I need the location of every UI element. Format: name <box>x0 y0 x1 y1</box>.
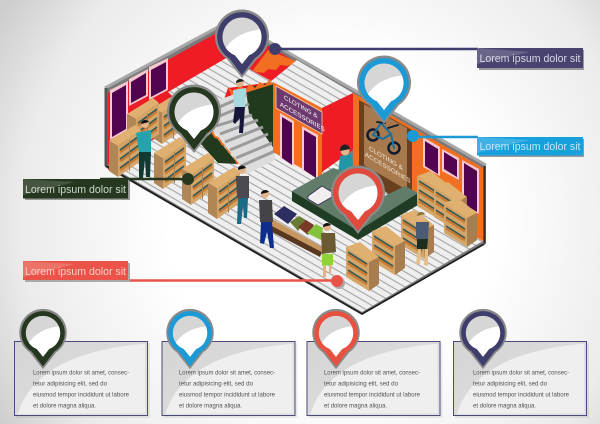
brown sign panel: CLOTING & <box>369 145 403 172</box>
connector: green <box>100 173 194 185</box>
person striped shirt <box>236 166 249 224</box>
label: red <box>23 261 130 282</box>
floor <box>108 96 483 312</box>
pin: card 4 <box>459 309 507 369</box>
text: card 1: Lorem ipsum dolor sit amet, consec- <box>33 370 129 376</box>
cash register <box>308 186 332 205</box>
person at left shelf <box>136 120 151 178</box>
text: card 4 <box>473 370 569 410</box>
brown sign panel: ACCESSORIES <box>365 151 411 185</box>
person navy jeans <box>259 190 274 248</box>
text: card 2: eiusmod tempor incididunt ut labore <box>179 392 275 398</box>
card 3 <box>307 309 442 418</box>
checkout counter <box>292 168 418 240</box>
shop roof <box>270 60 353 108</box>
text: card 2 <box>179 370 275 410</box>
pin: dark green <box>167 85 221 153</box>
text: card 2: tetur adipisicing elit, sed do <box>179 380 253 388</box>
pin: purple <box>215 10 269 78</box>
person on stairs <box>233 79 246 133</box>
text: card 3: eiusmod tempor incididunt ut labore <box>324 392 420 398</box>
text: card 3 <box>324 370 420 410</box>
card 4 <box>454 309 589 418</box>
connector: purple <box>269 43 478 55</box>
text: card 3: tetur adipisicing elit, sed do <box>324 380 398 388</box>
shelves back left <box>109 92 240 219</box>
connector: blue <box>407 130 478 142</box>
label: purple: Lorem ipsum dolor sit <box>480 53 580 65</box>
lower green void <box>200 132 238 164</box>
staircase <box>213 90 275 174</box>
text: card 4: Lorem ipsum dolor sit amet, consec- <box>473 370 569 376</box>
person: cashier <box>338 144 353 175</box>
floor edge <box>106 166 484 314</box>
pin: card 3 <box>312 309 360 369</box>
text: card 4: et dolore magna aliqua. <box>473 402 536 410</box>
text: card 2: et dolore magna aliqua. <box>179 402 242 410</box>
dark green void <box>246 82 273 150</box>
person right side <box>416 212 429 266</box>
shop facade <box>273 82 353 180</box>
label: green: Lorem ipsum dolor sit <box>25 184 126 196</box>
text: card 3: et dolore magna aliqua. <box>324 402 387 410</box>
label: blue <box>477 137 584 157</box>
isometric clothing store <box>105 20 486 315</box>
pin: card 2 <box>166 309 214 369</box>
text: card 4: eiusmod tempor incididunt ut labore <box>473 392 569 398</box>
text: card 3: Lorem ipsum dolor sit amet, consec- <box>324 370 420 376</box>
orange stair landing <box>253 50 298 73</box>
pin: red <box>331 166 385 234</box>
card 1 <box>14 309 150 418</box>
pin: blue <box>357 56 411 124</box>
text: card 1 <box>33 370 129 410</box>
pin: card 1 <box>19 309 67 369</box>
connector: red <box>100 275 345 289</box>
label: blue: Lorem ipsum dolor sit <box>480 141 580 153</box>
card 2 <box>162 309 298 418</box>
back wall windows <box>110 58 479 214</box>
shop sign: ACCESSORIES <box>280 101 325 134</box>
text: card 1: eiusmod tempor incididunt ut labore <box>33 392 129 398</box>
orange lower stair edge <box>212 132 238 164</box>
orange stair edge <box>228 79 274 97</box>
label: purple <box>477 48 584 70</box>
shop sign <box>276 86 325 134</box>
shop sign: CLOTING & <box>284 94 318 120</box>
upper floor <box>168 57 273 130</box>
clothes table <box>272 206 323 257</box>
building walls <box>105 20 486 315</box>
person with backpack <box>321 223 336 277</box>
text: card 1: tetur adipisicing elit, sed do <box>33 380 107 388</box>
icon: bicycle <box>368 122 400 154</box>
label: green <box>23 179 130 200</box>
text: card 4: tetur adipisicing elit, sed do <box>473 380 547 388</box>
text: card 1: et dolore magna aliqua. <box>33 402 96 410</box>
label: red: Lorem ipsum dolor sit <box>25 266 126 278</box>
text: card 2: Lorem ipsum dolor sit amet, consec- <box>179 370 275 376</box>
brown sign panel <box>359 100 412 198</box>
shelves right <box>346 171 477 291</box>
